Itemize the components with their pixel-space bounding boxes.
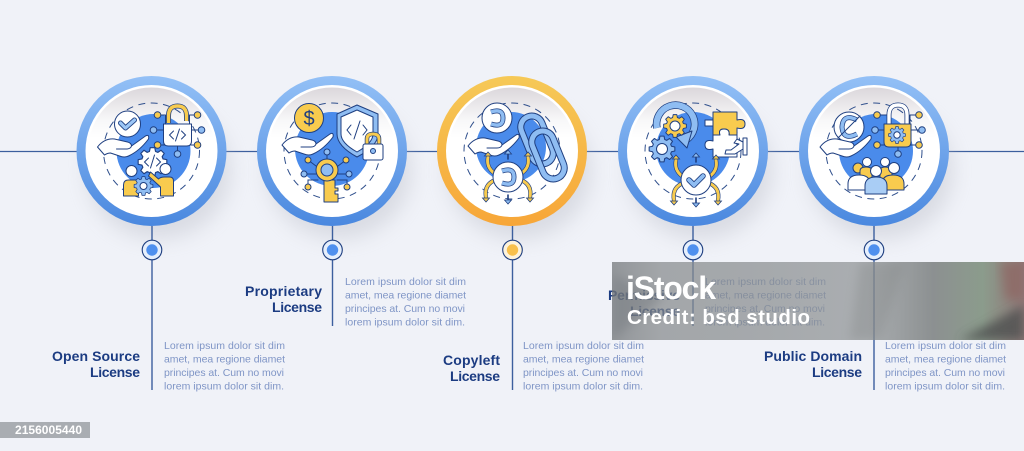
- icon: proprietary license: $: [303, 108, 315, 130]
- column 4: permissive license: [608, 226, 826, 328]
- heading: permissive license: License: [630, 303, 680, 319]
- text block: permissive description: amet, mea regione diamet: [705, 290, 826, 302]
- marker dot 4: [683, 240, 703, 260]
- heading: proprietary license: Proprietary: [245, 283, 322, 299]
- text block: open source description: principes at. Cum no movi: [164, 367, 284, 379]
- column 2: proprietary license: [245, 226, 466, 328]
- timeline horizontal line: [0, 150, 1024, 152]
- text block: copyleft description: principes at. Cum no movi: [523, 367, 643, 379]
- icon: copyleft license: [468, 103, 568, 204]
- text block: public domain description: principes at. Cum no movi: [885, 367, 1005, 379]
- column 3: copyleft license: [443, 226, 644, 392]
- watermark credit: Credit: bsd studio: [627, 306, 810, 329]
- icon: open source license: [98, 106, 205, 196]
- text block: copyleft description: lorem ipsum dolor sit dim.: [523, 380, 643, 392]
- text block: copyleft description: Lorem ipsum dolor sit dim: [523, 340, 644, 352]
- heading: public domain license: Public Domain: [764, 348, 862, 364]
- watermark banner: [612, 262, 1024, 340]
- marker dot 5: [864, 240, 884, 260]
- heading: proprietary license: License: [272, 299, 322, 315]
- step 3 medallion: copyleft, highlighted: [437, 76, 591, 239]
- watermark logo: iStock: [626, 270, 716, 306]
- column 1: open source license: [52, 226, 285, 392]
- heading: copyleft license: Copyleft: [443, 352, 500, 368]
- marker dot 3: [503, 240, 522, 260]
- text block: open source description: lorem ipsum dolor sit dim.: [164, 380, 284, 392]
- heading: copyleft license: License: [450, 368, 500, 384]
- text block: permissive description: Lorem ipsum dolor sit dim: [705, 276, 826, 288]
- step 5 medallion: public domain: [799, 76, 953, 239]
- icon: permissive license: [649, 105, 747, 207]
- text block: proprietary description: amet, mea regione diamet: [345, 290, 466, 302]
- column 5: public domain license: [764, 226, 1006, 392]
- text block: proprietary description: lorem ipsum dolor sit dim.: [345, 316, 465, 328]
- text block: permissive description: lorem ipsum dolor sit dim.: [705, 316, 825, 328]
- heading: permissive license: Permissive: [608, 287, 680, 303]
- text block: open source description: amet, mea regione diamet: [164, 354, 285, 366]
- heading: open source license: Open Source: [52, 348, 140, 364]
- text block: copyleft description: amet, mea regione diamet: [523, 354, 644, 366]
- text block: proprietary description: Lorem ipsum dolor sit dim: [345, 276, 466, 288]
- heading: open source license: License: [90, 364, 140, 380]
- stock image id tag: 2156005440: [15, 423, 82, 437]
- step 1 medallion: open source: [76, 76, 230, 239]
- step 4 medallion: permissive: [618, 76, 772, 239]
- text block: open source description: Lorem ipsum dolor sit dim: [164, 340, 285, 352]
- marker dot 1: [142, 240, 162, 260]
- icon: public domain license: [820, 105, 925, 194]
- stock image id tag: [0, 422, 90, 438]
- text block: permissive description: principes at. Cum no movi: [705, 303, 825, 315]
- text block: public domain description: amet, mea regione diamet: [885, 354, 1006, 366]
- heading: public domain license: License: [812, 364, 862, 380]
- text block: public domain description: lorem ipsum dolor sit dim.: [885, 380, 1005, 392]
- text block: public domain description: Lorem ipsum dolor sit dim: [885, 340, 1006, 352]
- step 2 medallion: proprietary: [257, 76, 411, 239]
- text block: proprietary description: principes at. Cum no movi: [345, 303, 465, 315]
- icon: proprietary license: [282, 104, 383, 202]
- marker dot 2: [323, 240, 342, 260]
